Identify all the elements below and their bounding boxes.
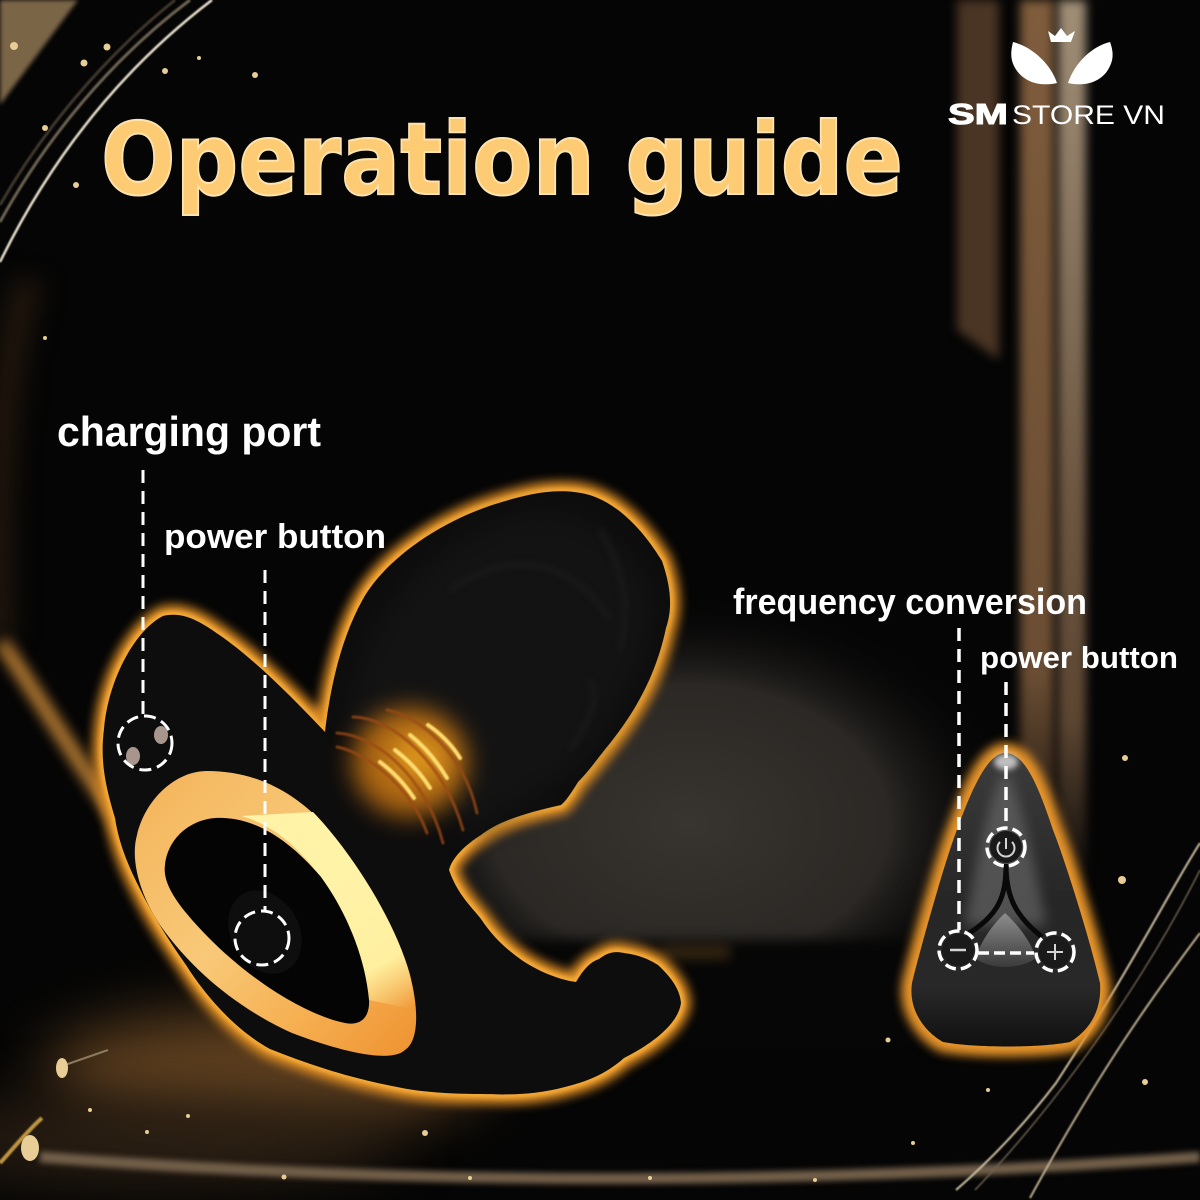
device: remote control	[911, 753, 1100, 1046]
button recess	[214, 877, 316, 987]
centre plate	[975, 913, 1036, 967]
logo wordmark: STORE VN: STORE VN	[1012, 100, 1165, 130]
remote glow	[911, 753, 1100, 1046]
body shape	[103, 491, 681, 1094]
button: minus	[942, 934, 974, 966]
ring highlight	[241, 812, 416, 1010]
remote top highlight	[994, 754, 1018, 770]
neck glow	[352, 707, 468, 817]
callout: power button on remote	[980, 640, 1178, 866]
rear wall panel	[360, 570, 1020, 1030]
neck glow core	[388, 732, 448, 784]
black face plate	[165, 818, 369, 1024]
callout: power button on remote: power button	[980, 640, 1178, 675]
soft outer glow	[103, 491, 681, 1094]
charging pins	[154, 726, 168, 744]
curtain stripes	[957, 0, 999, 360]
button: plus	[1039, 936, 1071, 968]
callout: charging port: charging port	[57, 408, 321, 455]
icon: power symbol	[997, 838, 1014, 857]
callout: charging port	[57, 408, 321, 770]
callout: frequency conversion	[733, 581, 1087, 971]
upper lobe shading	[345, 513, 652, 835]
remote body	[911, 753, 1100, 1046]
remote centre sheen	[965, 770, 1046, 925]
logo mark: SM: SM	[948, 99, 1008, 131]
icon: right leaf	[1068, 42, 1113, 84]
curved floor band	[40, 1157, 1200, 1178]
floor shadow	[440, 940, 1080, 1050]
floor glow	[45, 1012, 485, 1128]
gold ring	[135, 771, 416, 1056]
callout: power button on device	[164, 518, 386, 965]
title: Operation guide	[101, 101, 903, 218]
callout: power button on device: power button	[164, 518, 386, 556]
device: main product	[103, 491, 681, 1094]
logo: SM Store VN	[948, 28, 1165, 131]
icon: crown	[1048, 28, 1075, 42]
icon: minus sign	[950, 949, 966, 951]
Y-shaped connector	[966, 864, 1042, 937]
callout: frequency conversion: frequency conversion	[733, 581, 1087, 622]
neck ribs	[337, 710, 477, 843]
icon: plus sign	[1047, 944, 1063, 960]
bright outline	[103, 491, 681, 1094]
lobe ridges	[450, 530, 625, 750]
icon: left leaf	[1011, 42, 1057, 84]
button: power	[990, 831, 1022, 863]
